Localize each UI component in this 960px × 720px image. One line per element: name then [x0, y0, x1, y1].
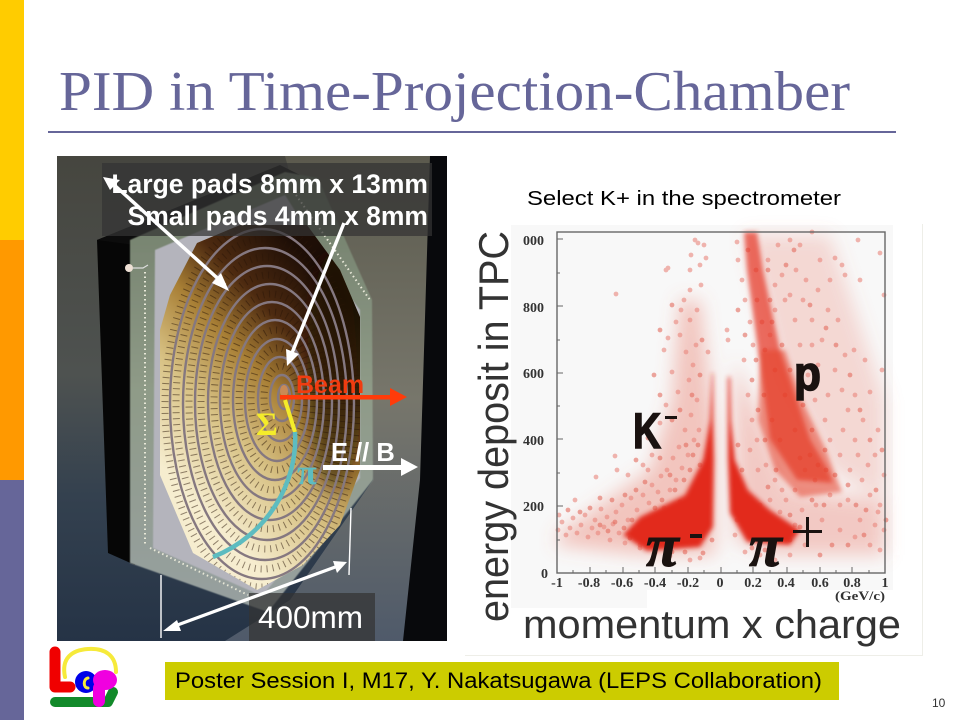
track: sigma — [257, 399, 297, 435]
y axis tick labels: 400 — [523, 434, 544, 449]
track: pion — [213, 432, 317, 557]
x axis tick labels: 1 — [882, 576, 888, 591]
icon: conference logo — [55, 649, 117, 702]
caption: select K+: Select K+ in the spectrometer — [527, 187, 841, 210]
track: pion: π — [297, 452, 317, 492]
particle label: K-: K — [633, 403, 661, 459]
x axis tick labels: -1 — [551, 576, 563, 591]
label: E // B: E // B — [331, 439, 395, 467]
y axis tick labels: 200 — [523, 500, 544, 515]
sidebar: colour stripes — [0, 0, 24, 720]
label: 400mm: 400mm — [258, 599, 363, 635]
y axis tick labels: 800 — [523, 301, 544, 316]
particle label: p: p — [794, 348, 821, 401]
page number: 10 — [932, 696, 946, 710]
particle label: pi-: π — [646, 513, 681, 579]
arrow: E // B — [323, 458, 418, 476]
label: pad sizes: Large pads 8mm x 13mm — [111, 169, 428, 199]
scatter points — [558, 232, 886, 560]
x axis tick labels: 0 — [716, 576, 724, 591]
photo background — [57, 156, 447, 641]
label: pad sizes: Small pads 4mm x 8mm — [128, 201, 428, 231]
y axis tick labels: 600 — [523, 367, 544, 382]
plot backdrop — [465, 224, 922, 656]
x axis tick labels: -0.6 — [611, 576, 633, 591]
dense band: negative pion — [623, 373, 714, 551]
connector pin — [125, 264, 148, 272]
panel: dE/dx scatter plot — [465, 224, 922, 656]
callout: poster session: Poster Session I, M17, Y. Nakatsugawa (LEPS Collaboration) — [175, 668, 822, 693]
arrow: 400mm dimension — [163, 561, 347, 631]
y axis tick labels — [523, 234, 548, 582]
title: PID in Time-Projection-Chamber — [59, 61, 850, 123]
arrow: large pads — [103, 177, 229, 291]
y axis tick labels: 0 — [541, 567, 548, 582]
particle label: pi+: π — [749, 513, 784, 579]
gold readout pads — [160, 225, 360, 590]
label band — [102, 163, 432, 236]
label: 400mm — [249, 593, 375, 641]
particle label: pi+ — [749, 513, 822, 579]
arrow: small pads — [286, 223, 344, 366]
y axis title: energy deposit in TPC — [470, 231, 517, 622]
x axis tick labels: 0.4 — [777, 576, 795, 591]
x axis tick labels: 0.2 — [744, 576, 762, 591]
panel: TPC photograph — [57, 156, 447, 641]
label: pad sizes — [111, 169, 428, 231]
detector board — [130, 172, 373, 612]
x axis tick labels: -0.4 — [644, 576, 666, 591]
board mounting dots — [145, 195, 370, 595]
label: Beam: Beam — [296, 371, 364, 399]
scatter halo — [557, 235, 885, 555]
arrow: beam — [280, 388, 407, 406]
x axis tick labels: (GeV/c) — [835, 588, 885, 603]
particle label: pi- — [646, 513, 702, 579]
x axis tick labels: -0.8 — [578, 576, 600, 591]
x axis tick labels: 0.6 — [811, 576, 829, 591]
track: sigma: Σ — [256, 407, 278, 443]
dimension lines — [161, 508, 351, 638]
x axis tick labels: -0.2 — [677, 576, 699, 591]
x axis tick labels: 0.8 — [843, 576, 861, 591]
x axis title: momentum x charge — [523, 603, 901, 647]
dense band: proton — [744, 232, 842, 497]
callout: poster session — [165, 662, 839, 700]
plot frame — [557, 232, 885, 573]
dense band: positive pion — [728, 377, 800, 545]
detector inner plate — [153, 195, 360, 596]
x axis tick labels — [551, 576, 888, 603]
y axis tick labels: 000 — [523, 234, 544, 249]
